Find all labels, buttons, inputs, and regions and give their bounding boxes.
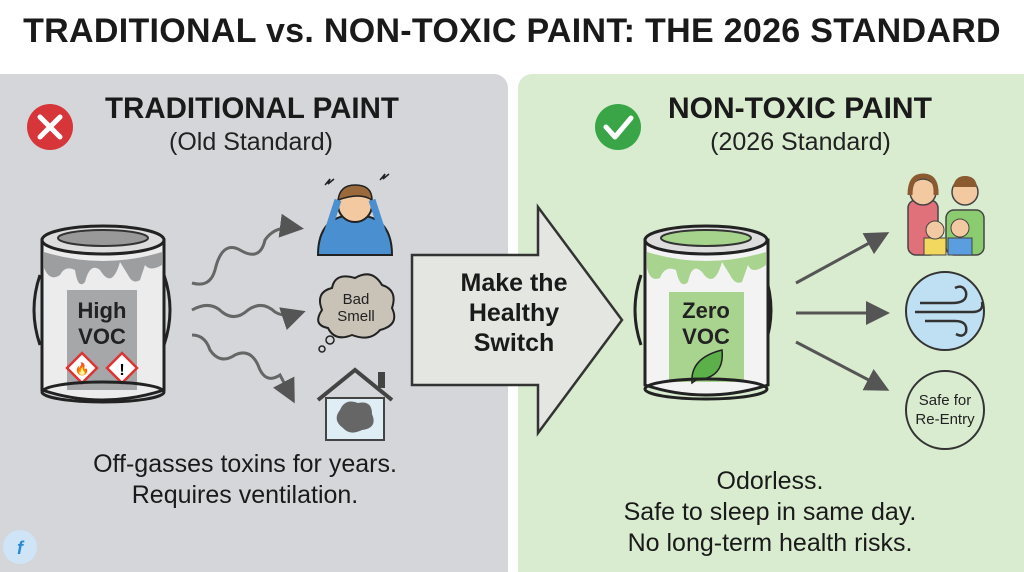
text: non-toxic benefits: Odorless. (716, 467, 823, 495)
text: traditional drawbacks (93, 450, 397, 509)
subheading: 2026 standard: (2026 Standard) (710, 128, 891, 156)
icon: red x (27, 104, 73, 150)
icon: high voc can: High (78, 298, 126, 323)
icon: bad smell cloud: Bad (343, 291, 369, 308)
arrows: straight right (796, 235, 884, 388)
icon: polluted house (318, 370, 392, 440)
text: non-toxic benefits: Safe to sleep in same day. (624, 498, 916, 526)
logo: f (17, 538, 25, 558)
icon: fresh air circle (906, 272, 984, 350)
icon: green check (595, 104, 641, 150)
icon: bad smell cloud (318, 274, 394, 352)
title: TRADITIONAL vs. NON-TOXIC PAINT: THE 2026 STANDARD (23, 12, 1001, 50)
icon: high voc can: ! (119, 362, 125, 379)
panel: traditional (0, 74, 508, 572)
logo (3, 530, 37, 564)
arrow: make the healthy switch: Make the (461, 269, 568, 297)
icon: safe for re-entry: Safe for (919, 392, 971, 409)
icon: zero voc can: Zero (682, 298, 730, 323)
icon: high voc can: 🔥 (75, 362, 89, 376)
icon: high voc can (34, 226, 170, 402)
icon: stressed person (318, 174, 392, 255)
arrow: make the healthy switch (412, 207, 622, 433)
text: traditional drawbacks: Requires ventilation. (132, 481, 358, 509)
icon: family (908, 176, 984, 255)
arrows: wavy left (192, 228, 300, 398)
icon: zero voc can (635, 226, 771, 399)
arrow: make the healthy switch: Healthy (469, 299, 559, 327)
text: non-toxic benefits (624, 467, 916, 557)
heading: traditional paint: TRADITIONAL PAINT (105, 92, 399, 125)
subheading: old standard: (Old Standard) (169, 128, 333, 156)
heading: non-toxic paint: NON-TOXIC PAINT (668, 92, 932, 125)
panel: non-toxic (518, 74, 1024, 572)
arrow: make the healthy switch: Switch (474, 329, 554, 357)
icon: high voc can: VOC (78, 324, 126, 349)
text: traditional drawbacks: Off-gasses toxins for years. (93, 450, 397, 478)
icon: bad smell cloud: Smell (337, 308, 375, 325)
text: non-toxic benefits: No long-term health risks. (628, 529, 912, 557)
icon: safe for re-entry (906, 371, 984, 449)
icon: safe for re-entry: Re-Entry (915, 411, 975, 428)
icon: zero voc can: VOC (682, 324, 730, 349)
